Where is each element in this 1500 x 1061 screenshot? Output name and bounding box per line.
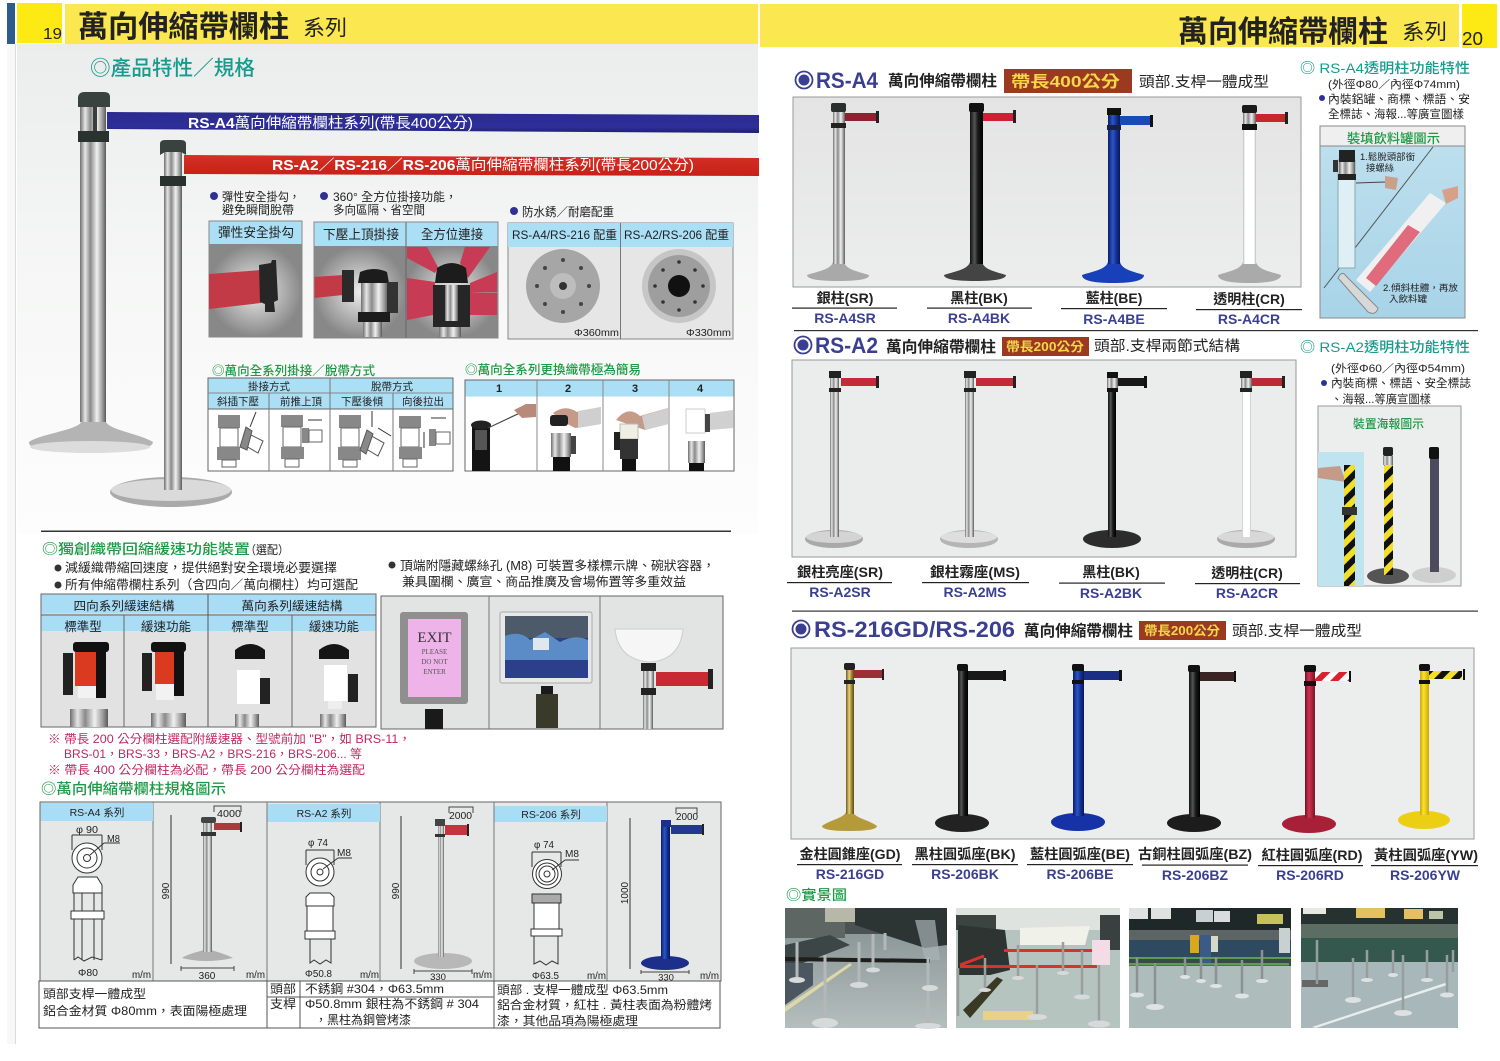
section header: RS-A2: 頭部.支桿兩節式結構 bbox=[1094, 337, 1241, 355]
section header: RS-A4: RS-A4 bbox=[816, 68, 879, 93]
badge: 200cm: 帶長200公分 bbox=[1006, 339, 1085, 354]
panel: can filling: 入飲料罐 bbox=[1389, 293, 1427, 304]
post: RS-A4 clear bbox=[1218, 105, 1288, 283]
post diagram: RS-206: 2000 bbox=[676, 812, 698, 823]
icon: pull out bbox=[399, 416, 450, 467]
post: red arc base bbox=[1282, 665, 1351, 833]
labels: RS-A2 colours: 透明柱(CR) bbox=[1211, 565, 1283, 581]
labels: RS-A2 colours: 黑柱(BK) bbox=[1082, 564, 1140, 580]
labels: RS-216GD and RS-206 colours: 紅柱圓弧座(RD) bbox=[1262, 847, 1362, 863]
table: slow retraction structures: 萬向系列緩速結構 bbox=[242, 598, 342, 613]
poster post: hazard stripes bbox=[1367, 447, 1409, 584]
panel: push-top connection and full direction bbox=[314, 222, 498, 338]
post: RS-A4 black bbox=[944, 103, 1016, 281]
post diagram: RS-A4: 990 bbox=[161, 882, 172, 899]
section note: RS-A2 clear post bbox=[1300, 339, 1472, 406]
dim labels: RS-206 head: M8 bbox=[565, 849, 579, 860]
photo: poster frame bbox=[500, 612, 592, 728]
badge: 400cm: 帶長400公分 bbox=[1011, 73, 1120, 91]
post: RS-A2 black bbox=[1083, 372, 1147, 548]
left title suffix: 系列 bbox=[303, 17, 347, 40]
post diagram: RS-206: 330 bbox=[658, 972, 674, 984]
diagram: RS-206 head bbox=[531, 852, 579, 965]
photo: universal slow bbox=[319, 644, 358, 727]
labels: RS-216GD and RS-206 colours: 古銅柱圓弧座(BZ) bbox=[1138, 846, 1252, 862]
header: RS-206 bbox=[494, 806, 607, 822]
post diagram: RS-A4: 4000 bbox=[217, 809, 241, 820]
photo: step 1 bbox=[471, 404, 536, 471]
labels: RS-216GD and RS-206 colours: 黃柱圓弧座(YW) bbox=[1374, 847, 1478, 863]
badge: 400cm bbox=[1004, 69, 1132, 93]
labels: RS-216GD and RS-206 colours: RS-206BE bbox=[1047, 866, 1113, 882]
table: replace belt steps: 4 bbox=[697, 383, 704, 395]
table: slow retraction structures: 四向系列緩速結構 bbox=[74, 598, 174, 613]
poster post: printed message bbox=[1412, 447, 1456, 583]
right title: 萬向伸縮帶欄柱 bbox=[1178, 16, 1388, 49]
panel: can filling bbox=[1320, 126, 1465, 318]
dim labels: RS-A2 head bbox=[305, 838, 379, 981]
spec notes table: ，黑柱為鋼管烤漆 bbox=[315, 1012, 411, 1027]
red notes: ※ 帶長 400 公分欄柱為必配，帶長 200 公分欄柱為選配 bbox=[48, 762, 365, 777]
post: bronze arc base bbox=[1167, 665, 1236, 832]
section note: RS-A2 clear post: 內裝商標、標語、安全標誌 bbox=[1331, 376, 1472, 390]
bullet text: 360 connection bbox=[320, 189, 457, 217]
photo: exit sign: EXIT bbox=[417, 630, 452, 646]
heading: specification diagrams: ◎萬向伸縮帶欄柱規格圖示 bbox=[41, 780, 226, 798]
labels: RS-216GD and RS-206 colours: 金柱圓錐座(GD) bbox=[800, 846, 900, 862]
section header: RS-A2 bbox=[794, 333, 1241, 358]
post: RS-A4 blue bbox=[1082, 108, 1153, 283]
icon: oblique insert bbox=[217, 412, 263, 467]
heading: real scenes: ◎實景圖 bbox=[786, 887, 847, 903]
band: RS-A2 / RS-216 / RS-206 200cm: RS-A2／RS-216／RS-206 萬向伸縮帶欄柱系列(帶長200公分) bbox=[272, 157, 694, 174]
labels: RS-A2 colours: RS-A2MS bbox=[943, 584, 1007, 600]
labels: RS-A2 colours: 銀柱亮座(SR) bbox=[797, 564, 883, 580]
spec notes table: 頭部 . 支桿一體成型 Φ63.5mm bbox=[497, 982, 668, 997]
optional label: （選配） bbox=[245, 543, 289, 557]
right title suffix: 系列 bbox=[1402, 21, 1447, 44]
post: gold bbox=[822, 663, 884, 831]
table: connect and disconnect methods: 脫帶方式 bbox=[371, 380, 413, 393]
panel: safety hook bbox=[209, 221, 302, 337]
post: blue arc base bbox=[1051, 664, 1122, 831]
photo: step 3 bbox=[614, 408, 668, 471]
section header: RS-A4: 頭部.支桿一體成型 bbox=[1139, 74, 1269, 91]
post diagram: RS-206 bbox=[620, 808, 719, 984]
labels: RS-A4 colours bbox=[792, 290, 1302, 327]
bullets: M8 screw hole: 頂端附隱藏螺絲孔 (M8) 可裝置多樣標示牌、碗狀容器， bbox=[400, 558, 715, 573]
section note: RS-A4 clear post: (外徑Φ80／內徑Φ74mm) bbox=[1328, 78, 1460, 91]
panel: poster mounting bbox=[1318, 406, 1461, 586]
panel: can filling: 1.鬆脫頭部銜 bbox=[1360, 151, 1415, 162]
header: RS-A2 bbox=[268, 804, 380, 822]
photo: scene 4 bbox=[1301, 908, 1458, 1028]
table: connect and disconnect methods bbox=[208, 378, 453, 471]
panel: can filling: 接螺絲 bbox=[1366, 162, 1394, 173]
dim labels: RS-A2 head: M8 bbox=[337, 848, 351, 859]
dim labels: RS-206 head: φ 74 bbox=[534, 840, 554, 851]
bullets: slow retraction: 所有伸縮帶欄柱系列（含四向／萬向欄柱）均可選配 bbox=[65, 577, 358, 592]
dim labels: RS-A4 head: Φ80 bbox=[78, 968, 98, 979]
labels: RS-216GD and RS-206 colours bbox=[797, 846, 1478, 883]
post diagram: RS-206: 1000 bbox=[620, 881, 631, 904]
panel: push-top connection and full direction: 全方位連接 bbox=[421, 227, 483, 242]
photo: scene 1 bbox=[785, 908, 947, 1029]
table: connect and disconnect methods: 掛接方式 bbox=[248, 380, 290, 393]
dim labels: RS-206 head: Φ63.5 bbox=[532, 971, 559, 982]
left title: 萬向伸縮帶欄柱 bbox=[78, 11, 289, 44]
badge: 200cm bbox=[1139, 621, 1226, 640]
bullets: M8 screw hole: 兼具圍欄、廣宣、商品推廣及會場佈置等多重效益 bbox=[402, 574, 686, 589]
heading: connect and disconnect: ◎萬向全系列掛接／脫帶方式 bbox=[212, 363, 375, 378]
labels: RS-A4 colours: 透明柱(CR) bbox=[1213, 291, 1285, 307]
red notes bbox=[48, 731, 411, 777]
dim labels: RS-A4 head: φ 90 bbox=[76, 825, 98, 836]
header: RS-206: RS-206 系列 bbox=[521, 808, 581, 821]
post diagram: RS-A2: 990 bbox=[391, 882, 402, 899]
red notes: BRS-01，BRS-33，BRS-A2，BRS-216，BRS-206... 等 bbox=[64, 746, 362, 761]
heading: replace belt: ◎萬向全系列更換織帶極為簡易 bbox=[465, 362, 641, 377]
labels: RS-216GD and RS-206 colours: 藍柱圓弧座(BE) bbox=[1030, 846, 1130, 862]
bullet text: 360 connection: 360° 全方位掛接功能， bbox=[333, 189, 457, 204]
post: RS-A2 clear bbox=[1217, 371, 1285, 548]
bullets: M8 screw hole bbox=[388, 558, 715, 589]
section note: RS-A4 clear post: 全標誌、海報...等廣宣圖樣 bbox=[1328, 107, 1464, 121]
labels: RS-216GD and RS-206 colours: RS-206RD bbox=[1276, 867, 1344, 883]
photo: four-way standard bbox=[63, 642, 109, 727]
page number 20: 20 bbox=[1462, 29, 1483, 49]
panel: poster mounting: 裝置海報圖示 bbox=[1353, 416, 1424, 431]
labels: RS-216GD and RS-206 colours: RS-206BZ bbox=[1162, 867, 1229, 883]
panel: specification table bbox=[40, 802, 721, 984]
labels: RS-216GD and RS-206 colours: RS-206BK bbox=[931, 866, 999, 882]
labels: RS-216GD and RS-206 colours: RS-216GD bbox=[816, 866, 884, 882]
post: black arc base bbox=[935, 664, 1006, 832]
table: slow retraction structures: 緩速功能 bbox=[141, 619, 191, 634]
post diagram: RS-A2: m/m bbox=[473, 970, 492, 981]
photo: scene 3 bbox=[1129, 908, 1291, 1028]
panel: safety hook: 彈性安全掛勾 bbox=[218, 225, 294, 240]
section note: RS-A4 clear post: 內裝鋁罐、商標、標語、安 bbox=[1328, 92, 1470, 106]
photo: exit sign: PLEASE bbox=[422, 648, 447, 656]
photo: exit sign: DO NOT bbox=[421, 658, 448, 666]
table: slow retraction structures: 標準型 bbox=[64, 619, 102, 634]
post: RS-A2 silver shiny bbox=[805, 371, 879, 548]
post: RS-A2 silver matte bbox=[940, 371, 1016, 548]
section note: RS-A4 clear post: ◎ RS-A4透明柱功能特性 bbox=[1300, 60, 1470, 76]
photo: exit sign: ENTER bbox=[423, 668, 446, 676]
large post RS-A4 bbox=[29, 92, 153, 453]
bullet text: safety hook: 彈性安全掛勾， bbox=[222, 189, 300, 204]
section header: RS-216GD / RS-206 bbox=[792, 617, 1362, 642]
labels: RS-A2 colours: 銀柱霧座(MS) bbox=[930, 564, 1020, 580]
spec notes table: 不銹鋼 #304，Φ63.5mm bbox=[305, 981, 444, 996]
table: connect and disconnect methods: 斜插下壓 bbox=[217, 395, 259, 408]
section note: RS-A2 clear post: ◎ RS-A2透明柱功能特性 bbox=[1300, 339, 1470, 355]
dim labels: RS-A2 head: m/m bbox=[360, 970, 379, 981]
icon: press and tilt bbox=[338, 411, 391, 467]
badge: 200cm: 帶長200公分 bbox=[1144, 623, 1221, 638]
section header: RS-216GD / RS-206: RS-216GD/RS-206 bbox=[814, 617, 1015, 642]
spec notes table: 頭部 bbox=[270, 981, 296, 996]
panel: can filling: 裝填飲料罐圖示 bbox=[1347, 131, 1440, 146]
badge: 200cm bbox=[1002, 337, 1089, 356]
band: RS-A4 400cm bbox=[107, 112, 759, 133]
photo: scene 2 bbox=[956, 908, 1120, 1028]
section header: RS-216GD / RS-206: 萬向伸縮帶欄柱 bbox=[1024, 621, 1133, 640]
post diagram: RS-A4 bbox=[161, 806, 265, 982]
panel: can filling: 2.傾斜柱體，再放 bbox=[1383, 282, 1458, 293]
section heading: product features: ◎產品特性／規格 bbox=[90, 57, 256, 80]
table: replace belt steps: 3 bbox=[632, 383, 638, 395]
post: RS-A4 silver bbox=[807, 103, 879, 281]
labels: RS-216GD and RS-206 colours: 黑柱圓弧座(BK) bbox=[914, 846, 1016, 862]
panel: base weights: RS-A2/RS-206 配重 bbox=[624, 228, 729, 242]
panel: base weights: Φ330mm bbox=[686, 327, 731, 339]
section note: RS-A2 clear post: (外徑Φ60／內徑Φ54mm) bbox=[1331, 362, 1465, 375]
divider left bbox=[41, 530, 731, 532]
section note: RS-A4 clear post bbox=[1300, 60, 1470, 121]
dim labels: RS-206 head: m/m bbox=[587, 971, 606, 982]
labels: RS-A2 colours: RS-A2CR bbox=[1216, 585, 1278, 601]
header: RS-A4 bbox=[40, 803, 153, 821]
large post RS-A2 bbox=[110, 140, 232, 507]
photo: step 2 bbox=[550, 407, 601, 471]
photo: universal standard bbox=[235, 644, 270, 727]
heading: slow retraction: ◎獨創織帶回縮緩速功能裝置 bbox=[42, 541, 250, 557]
post diagram: RS-A2: 2000 bbox=[449, 811, 472, 822]
post diagram: RS-A2: 330 bbox=[430, 972, 446, 983]
labels: RS-A4 colours: RS-A4CR bbox=[1218, 311, 1280, 327]
bullet text: weighted base: 防水銹／耐磨配重 bbox=[522, 204, 614, 219]
section header: RS-A2: 萬向伸縮帶欄柱 bbox=[886, 337, 996, 356]
spec notes table: 鋁合金材質，紅柱 . 黃柱表面為粉體烤 bbox=[497, 997, 712, 1012]
table: slow retraction structures bbox=[41, 594, 376, 727]
spec notes table: 頭部支桿一體成型 bbox=[43, 986, 146, 1001]
labels: RS-A2 colours bbox=[787, 564, 1300, 601]
labels: RS-A4 colours: 藍柱(BE) bbox=[1086, 290, 1142, 306]
post: yellow arc base bbox=[1398, 664, 1465, 829]
panel: base weights: Φ360mm bbox=[574, 327, 619, 339]
table: connect and disconnect methods: 前推上頂 bbox=[280, 395, 322, 408]
dim labels: RS-A2 head: φ 74 bbox=[308, 838, 328, 849]
table: replace belt steps: 1 bbox=[496, 383, 502, 395]
table: replace belt steps: 2 bbox=[565, 383, 571, 395]
spec notes table: Φ50.8mm 銀柱為不銹鋼 # 304 bbox=[305, 996, 479, 1011]
post diagram: RS-A2 bbox=[391, 807, 492, 983]
labels: RS-A4 colours: RS-A4SR bbox=[814, 310, 876, 326]
panel: base weights bbox=[508, 223, 733, 339]
spec notes table bbox=[39, 981, 720, 1028]
labels: RS-A4 colours: RS-A4BE bbox=[1083, 311, 1145, 327]
section header: RS-216GD / RS-206: 頭部.支桿一體成型 bbox=[1232, 623, 1362, 640]
dim labels: RS-A4 head bbox=[76, 825, 151, 981]
dim labels: RS-206 head bbox=[532, 840, 606, 982]
red notes: ※ 帶長 200 公分欄柱選配附緩速器、型號前加 "B"，如 BRS-11， bbox=[48, 731, 411, 746]
labels: RS-A4 colours: 銀柱(SR) bbox=[817, 290, 873, 306]
section header: RS-A4: 萬向伸縮帶欄柱 bbox=[888, 71, 997, 90]
header: RS-A4: RS-A4 系列 bbox=[70, 806, 124, 819]
post diagram: RS-206: m/m bbox=[700, 971, 719, 982]
labels: RS-216GD and RS-206 colours: RS-206YW bbox=[1390, 867, 1461, 883]
photo: step 4 bbox=[686, 409, 733, 471]
band: RS-A4 400cm: RS-A4萬向伸縮帶欄柱系列(帶長400公分) bbox=[188, 115, 473, 132]
icon: push forward bbox=[281, 415, 322, 467]
dim labels: RS-A4 head: m/m bbox=[132, 970, 151, 981]
page number 19: 19 bbox=[43, 26, 62, 43]
table: connect and disconnect methods: 下壓後傾 bbox=[341, 395, 383, 408]
bullets: slow retraction bbox=[54, 560, 358, 592]
bullet text: safety hook: 避免瞬間脫帶 bbox=[222, 202, 294, 217]
section header: RS-A4 bbox=[796, 68, 1269, 93]
labels: RS-A2 colours: RS-A2BK bbox=[1080, 585, 1142, 601]
bullets: slow retraction: 減緩織帶縮回速度，提供絕對安全環境必要選擇 bbox=[65, 560, 337, 575]
panel: RS-A4 posts bbox=[793, 97, 1301, 287]
left page header bbox=[17, 3, 758, 44]
labels: RS-A4 colours: 黑柱(BK) bbox=[950, 290, 1008, 306]
spec notes table: 漆，其他品項為陽極處理 bbox=[497, 1013, 638, 1028]
labels: RS-A4 colours: RS-A4BK bbox=[948, 310, 1010, 326]
bullet text: 360 connection: 多向區隔、省空間 bbox=[333, 202, 425, 217]
panel: RS-216GD and RS-206 posts bbox=[791, 648, 1474, 839]
bullet text: safety hook bbox=[210, 189, 300, 217]
labels: RS-A2 colours: RS-A2SR bbox=[809, 584, 871, 600]
right page header bbox=[760, 4, 1497, 49]
photo: bowl container bbox=[615, 629, 713, 729]
section note: RS-A2 clear post: 、海報...等廣宣圖樣 bbox=[1331, 392, 1431, 406]
diagram: RS-A2 head bbox=[305, 850, 352, 964]
panel: RS-A2 posts bbox=[792, 360, 1296, 557]
post diagram: RS-A4: 360 bbox=[199, 971, 216, 982]
section header: RS-A2: RS-A2 bbox=[815, 333, 878, 358]
panel: push-top connection and full direction: 下壓上頂掛接 bbox=[323, 227, 399, 242]
table: slow retraction structures: 標準型 bbox=[231, 619, 269, 634]
table: slow retraction structures: 緩速功能 bbox=[309, 619, 359, 634]
diagram: RS-A4 head bbox=[71, 835, 120, 961]
dim labels: RS-A2 head: Φ50.8 bbox=[305, 969, 332, 980]
panel: accessories photos bbox=[381, 596, 723, 729]
spec notes table: 鋁合金材質 Φ80mm，表面陽極處理 bbox=[43, 1003, 247, 1018]
header: RS-A2: RS-A2 系列 bbox=[297, 807, 351, 820]
table: connect and disconnect methods: 向後拉出 bbox=[402, 395, 444, 408]
spec notes table: 支桿 bbox=[270, 996, 296, 1011]
panel: base weights: RS-A4/RS-216 配重 bbox=[512, 228, 617, 242]
post diagram: RS-A4: m/m bbox=[246, 970, 265, 981]
dim labels: RS-A4 head: M8 bbox=[107, 834, 120, 845]
band: RS-A2 / RS-216 / RS-206 200cm bbox=[184, 155, 759, 176]
photo: four-way slow bbox=[142, 642, 186, 727]
table: replace belt steps bbox=[465, 380, 734, 471]
photo: exit sign bbox=[400, 612, 468, 729]
